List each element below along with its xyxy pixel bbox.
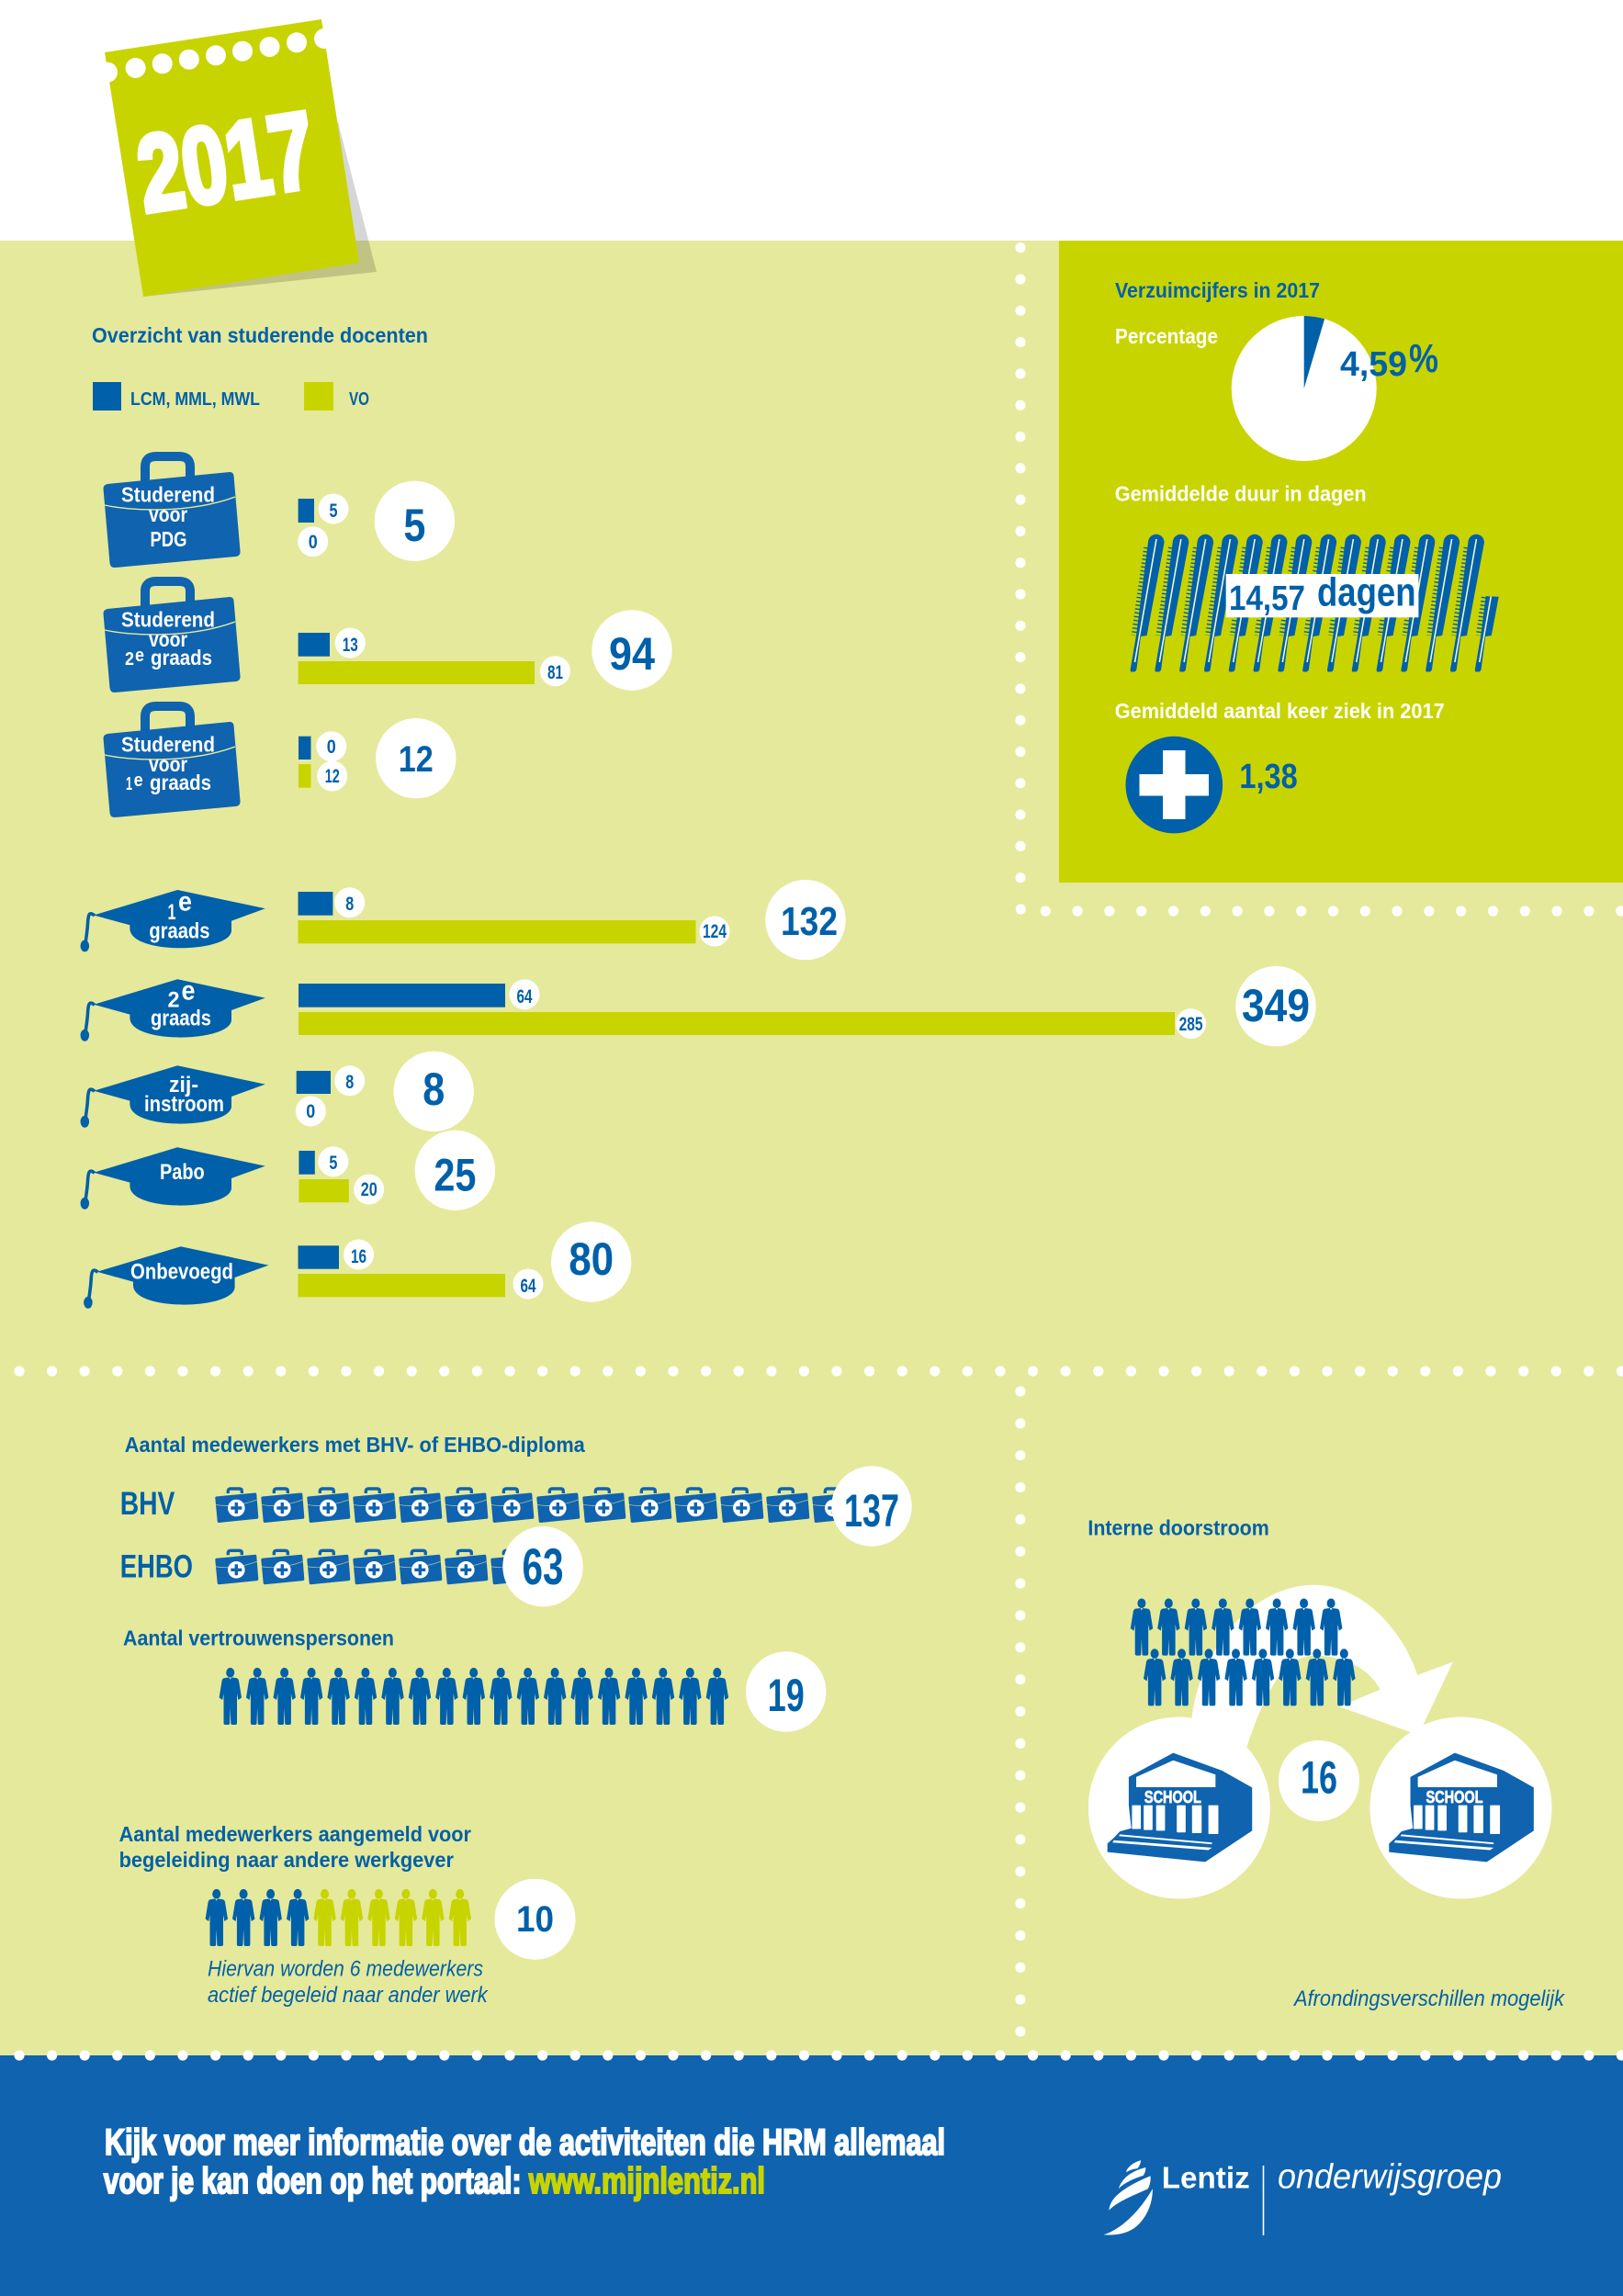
icon: briefcase 1e graads [103,706,241,817]
note: begeleiding: actief begeleid naar ander werk [208,1983,490,2008]
value 10 [494,1879,575,1960]
chart row: studerend 2e graads: 94 [609,628,655,680]
chart row: studerend 1e graads [299,718,456,798]
heading: BHV EHBO: Aantal medewerkers met BHV- of EHBO-diploma [125,1433,585,1457]
icon: hat 1e graads: graads [149,919,209,944]
legend label green: VO [349,389,369,410]
value: duur [1226,569,1418,618]
icon: briefcase 2e graads: Studerend [121,608,215,632]
value 16: 16 [1301,1752,1337,1804]
chart row: pabo: 5 [329,1153,338,1174]
logo tagline: onderwijsgroep [1278,2158,1502,2197]
icon: hat 1e graads [81,887,265,951]
value 10: 10 [516,1899,554,1940]
chart row: 1e graads: 8 [345,894,354,915]
footer text: Kijk voor meer informatie over de activiteiten die HRM allemaal [105,2122,945,2163]
note: begeleiding: Hiervan worden 6 medewerkers [208,1957,483,1982]
icon: hat pabo [81,1147,265,1210]
icon: briefcase PDG: Studerend [121,483,215,507]
chart row: 1e graads: 132 [781,899,838,944]
pictogram: 10 people [206,1889,471,1946]
panel: verzuim background [1059,241,1623,883]
calendar holes [97,28,334,83]
chart row: PDG: 5 [403,500,425,551]
footer text: www.mijnlentiz.nl [528,2161,765,2201]
legend swatch green [304,382,333,411]
icon: hat 2e graads [81,975,265,1041]
icon: school left: SCHOOL [1144,1788,1201,1807]
chart row: studerend 2e graads: 13 [343,635,358,656]
calendar sheet [105,19,359,297]
chart row: 1e graads: 124 [703,921,727,942]
chart row: studerend 1e graads: 0 [327,737,336,758]
first aid cases BHV [215,1489,855,1523]
chart row: 2e graads [299,966,1316,1046]
dotted separator lines [14,242,1623,2061]
heading: interne doorstroom: Interne doorstroom [1088,1515,1269,1539]
label: aantal keer ziek: Gemiddeld aantal keer ziek in 2017 [1115,699,1445,723]
heading: verzuimcijfers: Verzuimcijfers in 2017 [1115,278,1320,302]
chart row: pabo: 25 [434,1150,476,1201]
icon: hat pabo: Pabo [160,1160,205,1185]
icon: briefcase 1e graads: graads [150,771,211,794]
legend label blue: LCM, MML, MWL [130,389,260,410]
chart row: PDG: 5 [329,501,338,522]
value: percentage: 4,59 [1340,345,1407,384]
value: percentage: % [1409,336,1438,381]
value: percentage [1340,336,1438,384]
icon: calendar page with year 2017 [97,19,377,297]
logo: Lentiz onderwijsgroep [1104,2158,1502,2235]
pictogram: 19 people [220,1668,728,1725]
label: gemiddelde duur: Gemiddelde duur in dagen [1115,482,1367,506]
chart row: studerend 1e graads: 12 [325,766,340,787]
heading: begeleiding [119,1822,471,1872]
logo wordmark: Lentiz [1162,2161,1250,2195]
icon: briefcase 2e graads: 2 [125,649,134,670]
chart row: PDG: 0 [309,532,318,553]
year: 2017 [130,89,322,236]
heading: begeleiding: Aantal medewerkers aangemeld voor [119,1822,471,1846]
value 137: 137 [844,1485,899,1536]
chart row: 1e graads [298,880,846,960]
chart row: 2e graads: 349 [1242,980,1310,1031]
pie chart [1232,316,1377,461]
icon: school right: SCHOOL [1426,1788,1482,1807]
pictogram: 16 people [1131,1598,1356,1705]
logo divider [1263,2166,1264,2235]
icon: hat 2e graads: graads [151,1007,211,1031]
value 16 [1279,1740,1359,1821]
value: keer ziek: 1,38 [1239,758,1298,796]
chart row: zij-instroom: 8 [423,1064,445,1115]
chart row: zij-instroom: 8 [345,1072,354,1093]
arrow: doorstroom [1191,1585,1453,1747]
icon: briefcase PDG [103,456,241,568]
icon: hat zij-instroom: instroom [144,1092,224,1117]
chart row: pabo: 20 [361,1179,378,1200]
pictogram row: EHBO [120,1526,583,1606]
chart row: PDG [298,481,455,561]
value: duur: 14,57 [1229,580,1305,618]
icon: hat 1e graads: 1 [167,900,176,925]
chart row: zij-instroom [296,1052,474,1131]
label EHBO: EHBO [120,1548,193,1584]
chart row: 2e graads: 285 [1179,1014,1203,1035]
icon: briefcase 1e graads: e [134,771,143,791]
icon: briefcase 2e graads [103,581,241,692]
icon: school left [1088,1717,1270,1899]
icon: briefcase 1e graads: 1 [126,774,132,794]
icon: briefcase 1e graads: voor [149,752,187,776]
chart row: onbevoegd: 16 [351,1246,366,1267]
icon: hat zij-instroom: zij- [169,1073,198,1097]
chart row: pabo [299,1131,495,1210]
icon: hat 2e graads: 2 [167,988,180,1013]
light green background panel [0,241,1623,2056]
first aid cases EHBO [215,1550,534,1584]
footer text [104,2122,945,2201]
chart row: studerend 2e graads [299,610,672,691]
value 137 [831,1466,912,1547]
icon: hat onbevoegd: Onbevoegd [130,1260,233,1285]
chart row: onbevoegd [298,1221,631,1302]
icon: briefcase 2e graads: graads [151,646,212,670]
chart row: studerend 1e graads: 12 [399,739,434,780]
footer text: voor je kan doen op het portaal: [104,2161,522,2201]
chart row: 2e graads: 64 [516,986,533,1007]
value 63 [502,1526,583,1606]
label: percentage: Percentage [1115,324,1218,348]
value 19: 19 [768,1670,805,1721]
legend [93,382,369,411]
logo flame [1104,2160,1153,2235]
chart row: onbevoegd: 64 [520,1276,536,1297]
heading: vertrouwenspersonen: Aantal vertrouwenspersonen [123,1626,394,1650]
note: begeleiding [208,1957,490,2008]
thermometers pictogram [1131,535,1509,672]
label BHV: BHV [120,1486,175,1522]
chart row: zij-instroom: 0 [306,1101,315,1122]
value 63: 63 [522,1537,564,1595]
footer band [0,2055,1623,2296]
icon: plus circle [1126,737,1223,833]
value: duur: dagen [1317,569,1416,615]
icon: hat 2e graads: e [182,975,195,1006]
heading: overzicht: Overzicht van studerende docenten [92,323,428,347]
note: afrondingsverschillen: Afrondingsverschillen mogelijk [1292,1986,1566,2011]
chart row: onbevoegd: 80 [569,1233,614,1285]
pictogram row: BHV [120,1466,912,1547]
legend swatch blue [93,382,121,411]
calendar shadow [143,122,377,297]
icon: briefcase PDG: voor [149,502,187,526]
chart row: studerend 2e graads: 81 [547,662,563,683]
icon: briefcase 2e graads: e [135,646,144,666]
heading: begeleiding: begeleiding naar andere werkgever [119,1848,454,1872]
icon: school right [1370,1717,1552,1899]
icon: briefcase 1e graads: Studerend [121,733,215,757]
icon: hat 1e graads: e [178,887,192,917]
icon: hat onbevoegd [84,1246,268,1309]
icon: briefcase 2e graads: voor [149,627,187,651]
icon: hat zij-instroom [81,1065,265,1128]
value 19 [746,1651,826,1732]
icon: briefcase PDG: PDG [151,527,187,551]
panel: verzuimcijfers [1115,278,1509,833]
